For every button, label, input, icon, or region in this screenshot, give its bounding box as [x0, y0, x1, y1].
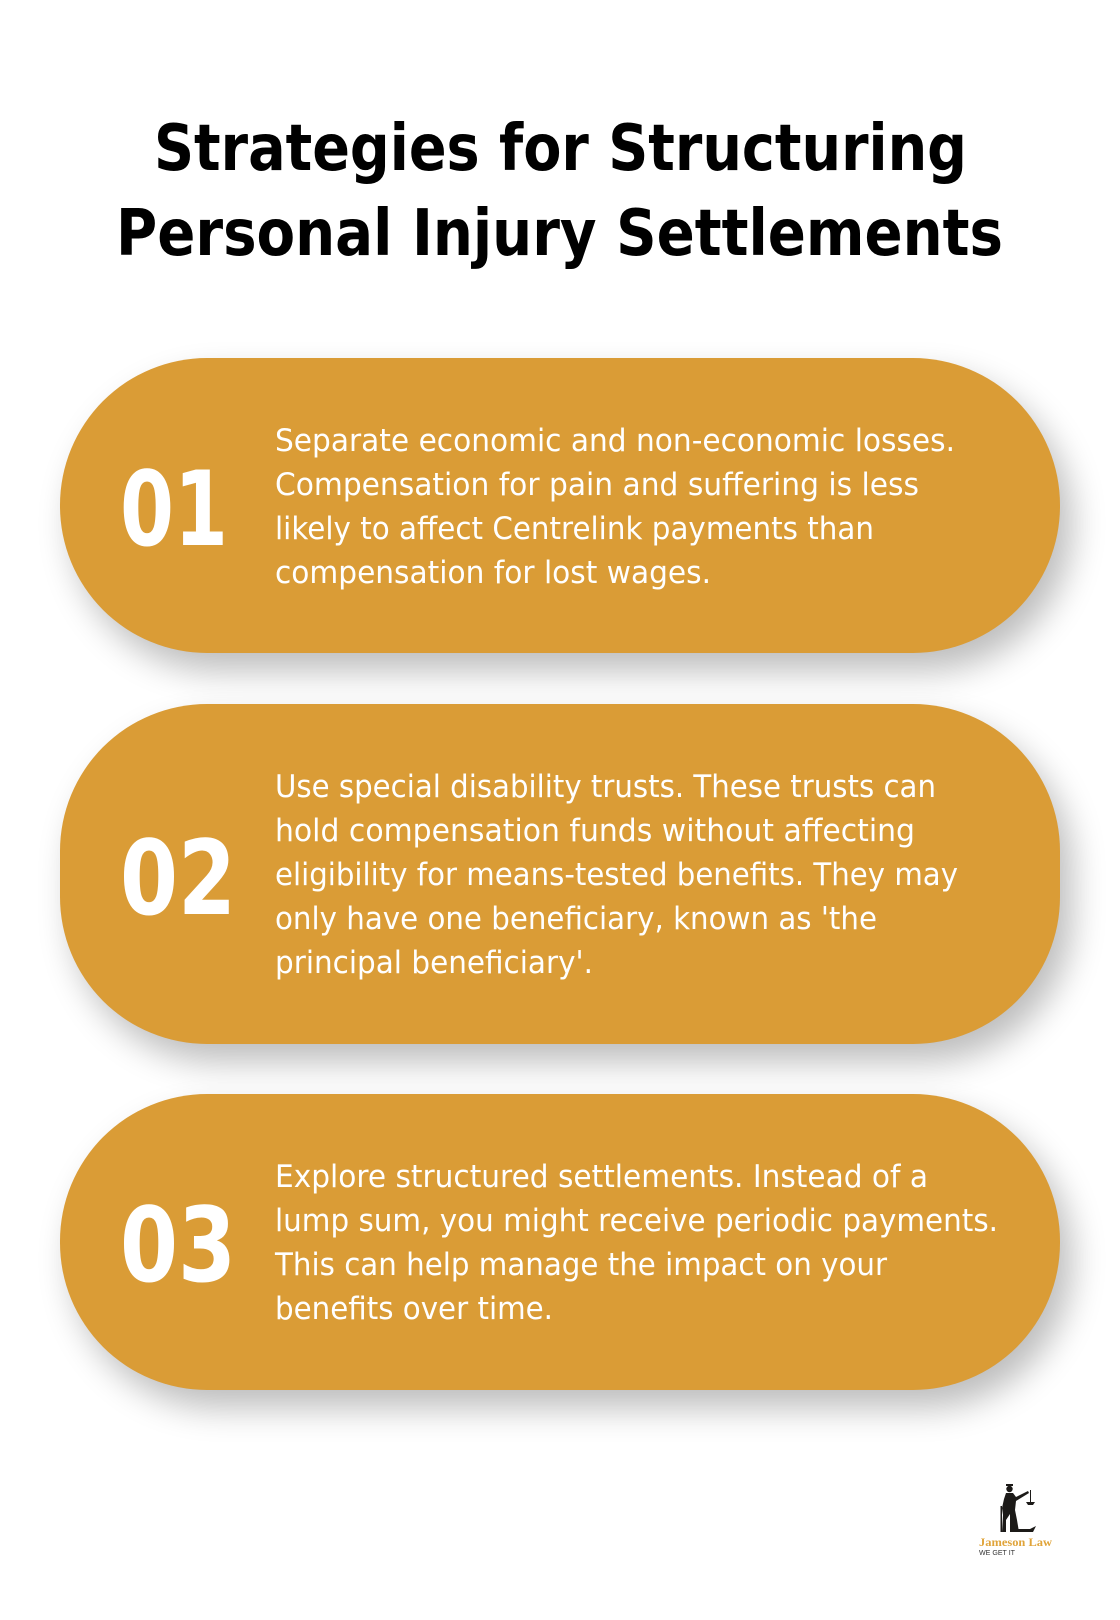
- text block 02: principal beneficiary'.: [275, 945, 593, 981]
- text block 01: likely to affect Centrelink payments than: [275, 511, 874, 547]
- logo tagline: WE GET IT: [979, 1550, 1016, 1557]
- text block 03: This can help manage the impact on your: [274, 1247, 887, 1283]
- number 03: 03: [120, 1186, 236, 1306]
- title: [116, 112, 1003, 271]
- title: Strategies for Structuring: [154, 112, 967, 186]
- text block 03: lump sum, you might receive periodic payments.: [275, 1203, 998, 1239]
- number 01: 01: [120, 450, 228, 570]
- text block 03: Explore structured settlements. Instead of a: [275, 1159, 928, 1195]
- text block 03: benefits over time.: [275, 1291, 553, 1327]
- panel: strategy 01: [60, 358, 1072, 671]
- text block 03: [274, 1159, 998, 1327]
- logo: Jameson Law: [979, 1484, 1053, 1557]
- number 02: 02: [120, 819, 236, 939]
- text block 02: eligibility for means-tested benefits. They may: [275, 857, 958, 893]
- text block 02: only have one beneficiary, known as 'the: [275, 901, 877, 937]
- logo name: Jameson Law: [979, 1537, 1053, 1549]
- panel: strategy 02: [60, 704, 1072, 1062]
- text block 01: compensation for lost wages.: [275, 555, 711, 591]
- panel: strategy 03: [60, 1094, 1072, 1408]
- text block 02: hold compensation funds without affecting: [275, 813, 915, 849]
- icon: lady justice: [1000, 1484, 1036, 1532]
- text block 01: Separate economic and non-economic losses.: [275, 423, 955, 459]
- text block 01: [275, 423, 955, 591]
- title: Personal Injury Settlements: [116, 197, 1003, 271]
- text block 02: Use special disability trusts. These trusts can: [275, 769, 936, 805]
- text block 01: Compensation for pain and suffering is less: [275, 467, 919, 503]
- text block 02: [275, 769, 958, 981]
